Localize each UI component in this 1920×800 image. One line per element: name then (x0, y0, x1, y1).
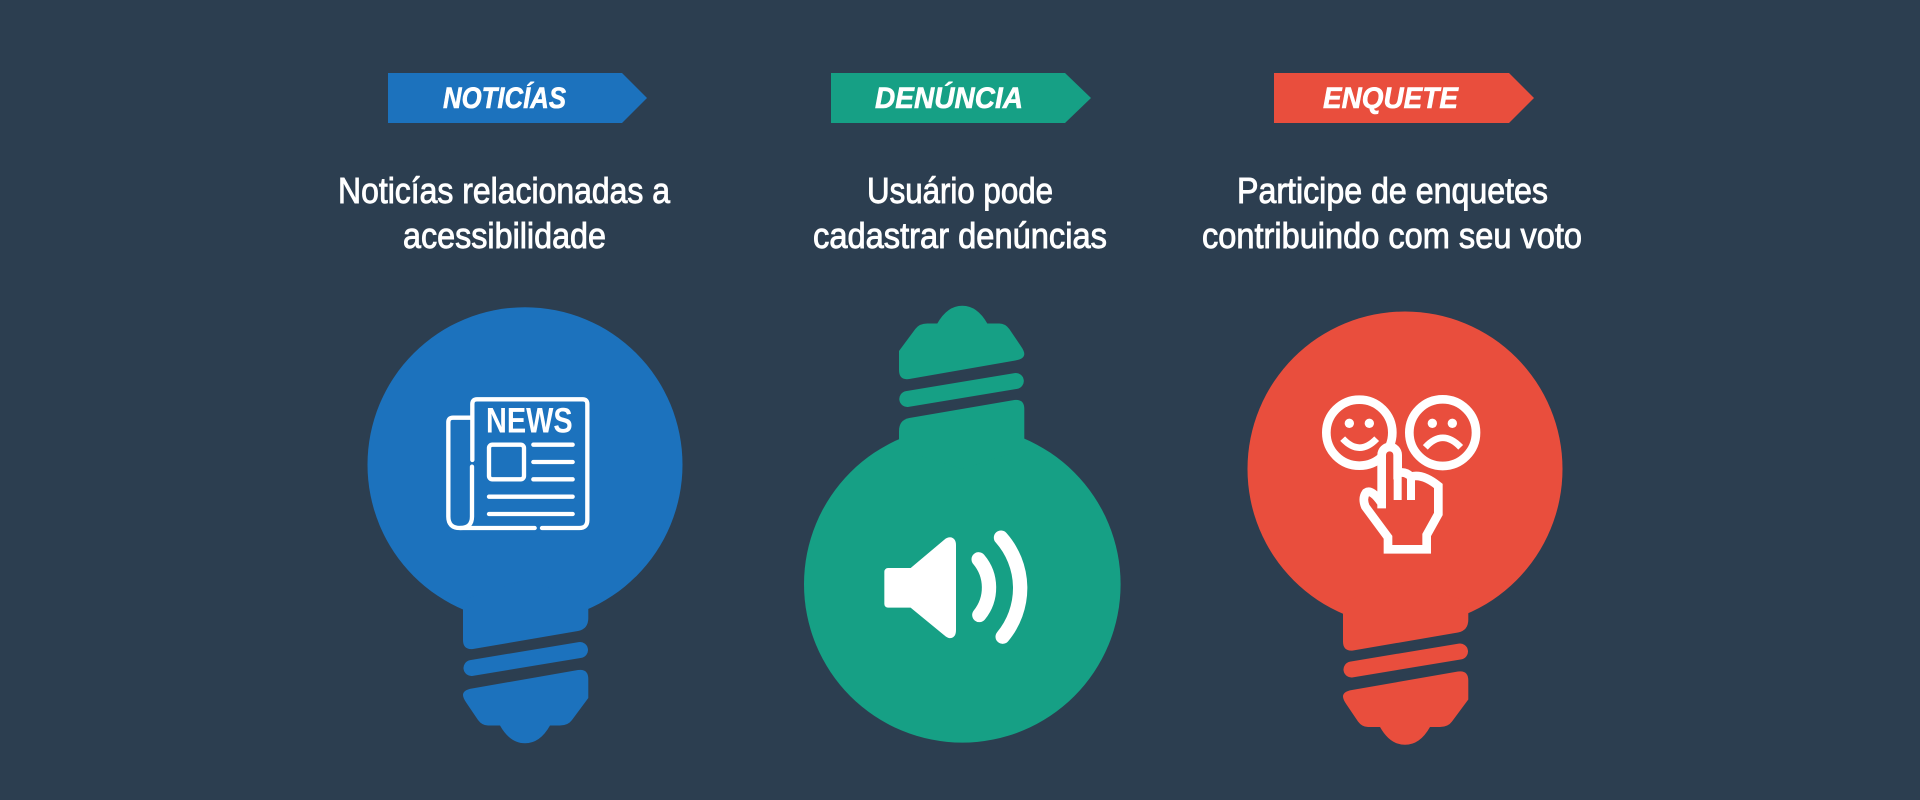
panel: denuncia (804, 73, 1121, 743)
icon: voting hand with faces (1326, 399, 1476, 549)
banner: denuncia: DENÚNCIA (875, 81, 1023, 115)
lightbulb: green (804, 306, 1121, 743)
description: denuncia: cadastrar denúncias (813, 215, 1107, 256)
banner: noticias (388, 73, 647, 123)
description: enquete (1202, 170, 1582, 256)
panel: noticias (338, 73, 682, 743)
banner: noticias: NOTICÍAS (443, 81, 566, 115)
description: denuncia: Usuário pode (867, 170, 1053, 211)
icon: newspaper: NEWS (486, 402, 573, 441)
lightbulb: red (1248, 312, 1562, 745)
lightbulb: blue (368, 307, 682, 743)
icon: newspaper (448, 399, 587, 528)
description: noticias (338, 170, 671, 256)
description: enquete: Participe de enquetes (1237, 170, 1548, 211)
description: noticias: acessibilidade (403, 215, 606, 256)
banner: enquete (1274, 73, 1534, 123)
description: denuncia (813, 170, 1107, 256)
description: noticias: Noticías relacionadas a (338, 170, 671, 211)
banner: denuncia (831, 73, 1091, 123)
panel: enquete (1202, 73, 1582, 745)
description: enquete: contribuindo com seu voto (1202, 215, 1582, 256)
icon: speaker (888, 538, 1020, 637)
banner: enquete: ENQUETE (1323, 82, 1459, 115)
